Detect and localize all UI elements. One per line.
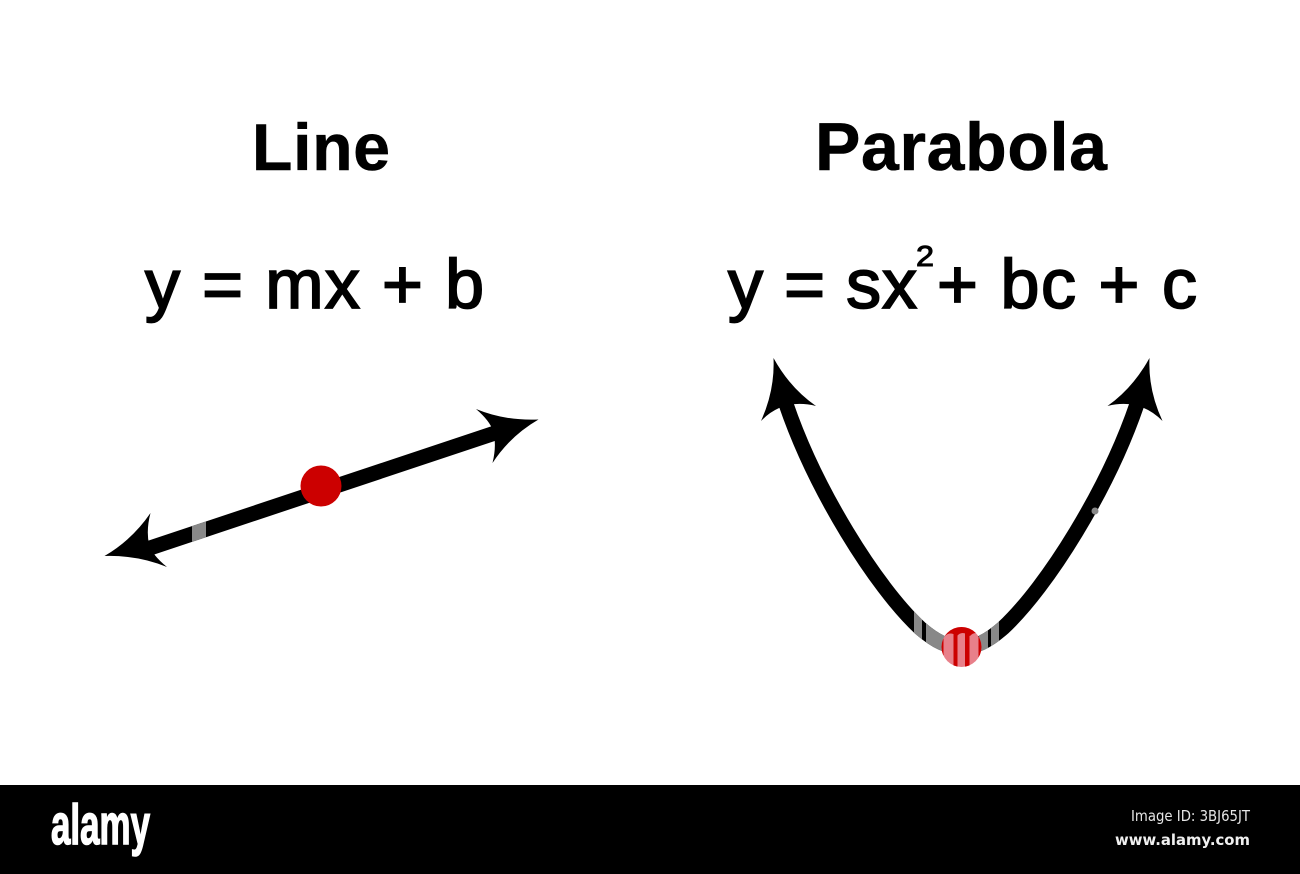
- website: www.alamy.com: [1115, 831, 1250, 849]
- vertex point: [942, 627, 982, 667]
- panel: line: [104, 110, 538, 567]
- panel: parabola: [728, 109, 1197, 669]
- formula: line equation: y = mx + b: [145, 245, 484, 323]
- image id: Image ID: 3BJ65JT: [1131, 807, 1251, 825]
- heading: Line: Line: [252, 110, 390, 184]
- chart: parabola curve with arrowheads: [761, 358, 1162, 669]
- line shaft: [150, 433, 495, 548]
- parabola right branch: [962, 404, 1137, 648]
- watermark fragment: [192, 521, 206, 542]
- formula: parabola equation: + bc + c: [937, 245, 1197, 323]
- footer bar: [0, 785, 1300, 874]
- formula: parabola equation: y = sx: [728, 245, 917, 323]
- parabola left branch: [786, 404, 962, 648]
- arrow: right arrowhead: [1108, 358, 1162, 421]
- arrow: left arrowhead: [761, 358, 816, 421]
- watermark fragments on curve: [914, 508, 1098, 651]
- point on line: [300, 466, 342, 506]
- chart: line with arrowheads: [104, 409, 538, 567]
- arrow: right arrowhead: [476, 409, 538, 463]
- superscript 2: 2: [916, 241, 934, 273]
- arrow: left arrowhead: [104, 513, 167, 567]
- heading: Parabola: Parabola: [815, 109, 1108, 185]
- formula: parabola equation: [728, 241, 1197, 323]
- footer logo: alamy: [51, 793, 150, 857]
